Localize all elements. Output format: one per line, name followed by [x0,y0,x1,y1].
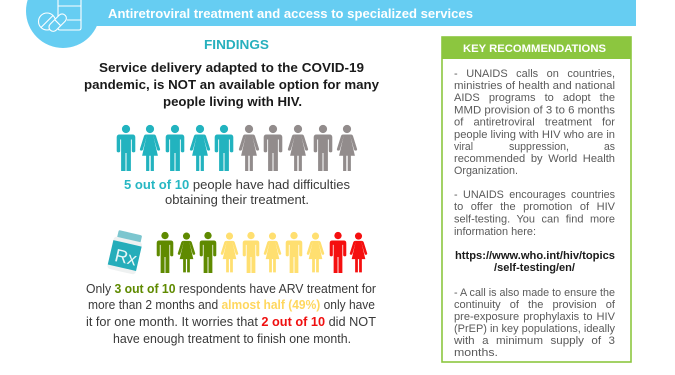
treatment supply text: have enough treatment to finish one month. [113,332,351,346]
recommendation 3: with a minimum supply of 3 [453,335,615,347]
header title: Antiretroviral treatment and access to specialized services [108,7,473,21]
link: https://www.who.int/hiv/topics [455,250,615,262]
treatment supply text: it for one month. It worries that 2 out of 10 did NOT [86,315,376,329]
findings statement: people living with HIV. [163,95,302,109]
icon: Rx bottle [107,229,144,275]
icon: medicine bottle and pills [38,0,81,33]
caption: 5 out of 10 [124,178,350,207]
recommendation 1: recommended by World Health [454,153,615,165]
recommendation 2: to offer the promotion of HIV [454,201,616,213]
recommendation 1: as [604,141,615,153]
treatment supply text: more than 2 months and almost half (49%) only have [88,298,375,312]
recommendation 3: - A call is also made to ensure the [454,287,615,299]
recommendation 1: AIDS programs to adopt the [454,92,615,104]
findings heading: FINDINGS [204,38,269,52]
findings statement [84,61,379,109]
recommendation 1: ministries of health and national [454,80,615,92]
pictogram: treatment supply [157,232,367,273]
recommendation 1: of antiretroviral treatment for [454,116,615,128]
recommendation 1: suppression, [509,141,569,153]
recommendation 1: MMD provision of 3 to 6 months [454,104,616,116]
recommendation 3: months. [454,347,498,359]
pictogram: 5 out of 10 people [117,125,357,171]
recommendation 2: self-testing. You can find more [454,214,615,226]
treatment supply text [86,282,376,346]
recommendation 3: pre-exposure prophylaxis to HIV [454,311,616,323]
recommendation 2: - UNAIDS encourages countries [454,189,615,201]
recommendation 3 [453,287,616,359]
icon: Rx bottle: Rx [113,245,139,270]
recommendation 1: viral [454,141,473,153]
findings statement: pandemic, is NOT an available option for many [84,78,379,92]
findings statement: Service delivery adapted to the COVID-19 [99,61,364,75]
recommendation 2 [454,189,616,238]
panel heading: KEY RECOMMENDATIONS [463,43,606,55]
panel: key recommendations [442,37,631,362]
caption: 5 out of 10: obtaining their treatment. [165,193,309,207]
link: /self-testing/en/ [494,262,575,274]
caption: 5 out of 10: 5 out of 10 people have had difficulties [124,178,350,192]
recommendation 1: people living with HIV who are in [454,129,615,141]
link [455,250,615,274]
recommendation 2: information here: [454,226,536,238]
recommendation 3: continuity of the provision of [454,299,616,311]
recommendation 1: Organization. [454,165,518,177]
treatment supply text: Only 3 out of 10 respondents have ARV treatment for [86,282,376,296]
recommendation 3: (PrEP) in key populations, ideally [454,323,615,335]
recommendation 1 [454,68,616,177]
recommendation 1: - UNAIDS calls on countries, [454,68,615,80]
header banner [26,0,636,48]
